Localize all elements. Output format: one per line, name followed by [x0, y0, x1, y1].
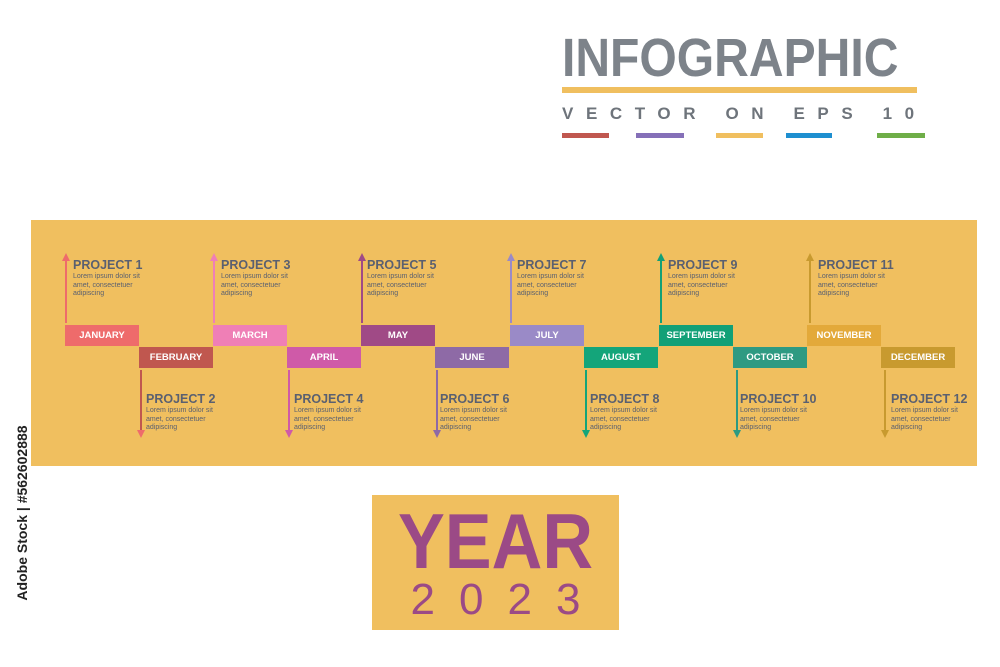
panel: timeline: PROJECT 2 [146, 392, 215, 406]
panel: timeline: PROJECT 7 [517, 258, 586, 272]
panel: timeline: amet, consectetuer [294, 416, 354, 422]
year box: YEAR [398, 497, 593, 585]
panel: timeline: Lorem ipsum dolor sit [517, 273, 584, 280]
panel: timeline: PROJECT 12 [891, 392, 967, 406]
panel: timeline: Lorem ipsum dolor sit [740, 407, 807, 414]
project labels: adipiscing [73, 290, 104, 297]
panel: timeline: PROJECT 10 [740, 392, 816, 406]
panel: timeline: SEPTEMBER [666, 330, 726, 341]
panel: timeline: amet, consectetuer [590, 416, 650, 422]
panel: timeline: JUNE [459, 352, 485, 363]
panel: timeline: amet, consectetuer [517, 282, 577, 288]
panel: timeline: DECEMBER [891, 352, 945, 363]
panel: timeline: adipiscing [221, 290, 252, 297]
panel: timeline: Lorem ipsum dolor sit [221, 273, 288, 280]
panel: timeline: Lorem ipsum dolor sit [440, 407, 507, 414]
title: INFOGRAPHIC [562, 28, 898, 88]
panel: timeline: adipiscing [146, 424, 177, 431]
panel: timeline [31, 220, 977, 466]
panel: timeline: Lorem ipsum dolor sit [668, 273, 735, 280]
panel: timeline: amet, consectetuer [668, 282, 728, 288]
panel: timeline: Lorem ipsum dolor sit [367, 273, 434, 280]
panel: timeline: adipiscing [668, 290, 699, 297]
panel: timeline: amet, consectetuer [146, 416, 206, 422]
panel: timeline: PROJECT 4 [294, 392, 363, 406]
panel: timeline: PROJECT 8 [590, 392, 659, 406]
panel: timeline: OCTOBER [746, 352, 794, 363]
panel: timeline: APRIL [310, 352, 338, 363]
panel: timeline: JULY [535, 330, 559, 341]
panel: timeline: adipiscing [818, 290, 849, 297]
month boxes: JANUARY [79, 330, 125, 341]
panel: timeline: amet, consectetuer [367, 282, 427, 288]
panel: timeline: FEBRUARY [150, 352, 202, 363]
panel: timeline: PROJECT 9 [668, 258, 737, 272]
panel: timeline: MAY [388, 330, 408, 341]
panel: timeline: amet, consectetuer [891, 416, 951, 422]
panel: timeline: adipiscing [517, 290, 548, 297]
panel: timeline: adipiscing [367, 290, 398, 297]
panel: timeline: amet, consectetuer [221, 282, 281, 288]
panel: timeline: amet, consectetuer [818, 282, 878, 288]
project labels: Lorem ipsum dolor sit [73, 273, 140, 280]
panel: timeline: adipiscing [440, 424, 471, 431]
panel: timeline: adipiscing [740, 424, 771, 431]
panel: timeline: MARCH [232, 330, 268, 341]
colour bars [562, 133, 925, 138]
year box [372, 495, 619, 630]
panel: timeline: PROJECT 3 [221, 258, 290, 272]
panel: timeline: PROJECT 5 [367, 258, 436, 272]
panel: timeline: Lorem ipsum dolor sit [590, 407, 657, 414]
panel: timeline: amet, consectetuer [740, 416, 800, 422]
panel: timeline: adipiscing [891, 424, 922, 431]
year box: 2023 [411, 575, 604, 624]
month boxes [65, 325, 139, 346]
panel: timeline: PROJECT 6 [440, 392, 509, 406]
panel: timeline: Lorem ipsum dolor sit [891, 407, 958, 414]
panel: timeline: AUGUST [601, 352, 641, 363]
panel: timeline: Lorem ipsum dolor sit [294, 407, 361, 414]
subtitle: VECTOR ON EPS 10 [562, 104, 927, 123]
panel: timeline: Lorem ipsum dolor sit [146, 407, 213, 414]
project labels: amet, consectetuer [73, 282, 133, 288]
arrows [62, 253, 889, 438]
project labels [73, 258, 142, 297]
panel: timeline: adipiscing [590, 424, 621, 431]
panel: timeline: NOVEMBER [817, 330, 871, 341]
panel: timeline: PROJECT 11 [818, 258, 894, 272]
watermark side text: Adobe Stock | #562602888 [14, 425, 30, 601]
panel: timeline: adipiscing [294, 424, 325, 431]
panel: timeline: amet, consectetuer [440, 416, 500, 422]
project labels: PROJECT 1 [73, 258, 142, 272]
panel: timeline: Lorem ipsum dolor sit [818, 273, 885, 280]
